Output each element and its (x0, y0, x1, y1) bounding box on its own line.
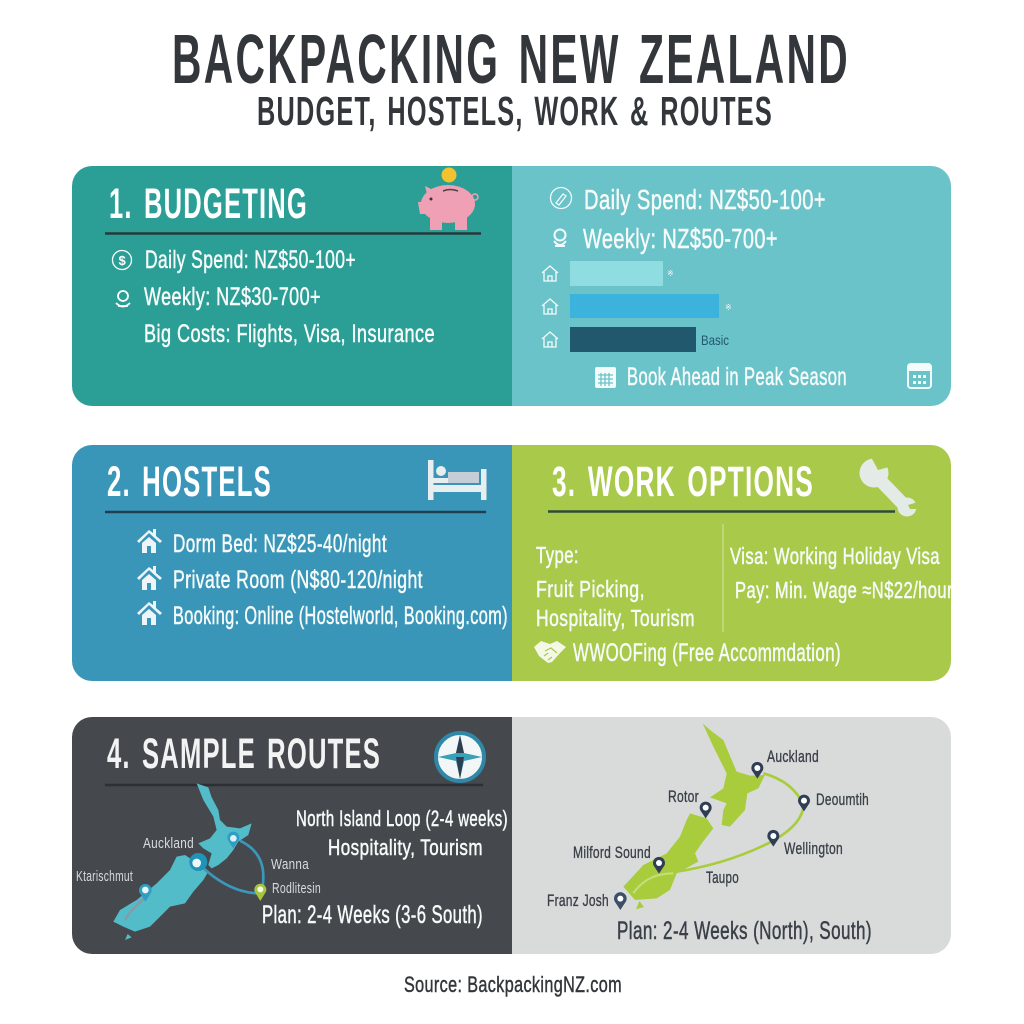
routes heading: 4. SAMPLE ROUTES (107, 730, 381, 778)
icon: house row 3 (542, 332, 558, 347)
work background (512, 445, 951, 681)
map label: routeburn: Rodlitesin (272, 880, 321, 897)
map: new zealand dark (113, 783, 266, 940)
hostels item: dorm bed: Dorm Bed: NZ$25-40/night (173, 530, 387, 558)
panel: route map (512, 717, 951, 954)
work item: visa: Visa: Working Holiday Visa (730, 543, 940, 569)
bar chart: accommodation tiers (542, 261, 732, 352)
route text: north island loop: North Island Loop (2-4 weeks) (296, 806, 508, 831)
icon: house (137, 601, 162, 625)
hostels item: private room: Private Room (N$80-120/night (173, 566, 423, 594)
hostels item: booking: Booking: Online (Hostelworld, Booking.com) (173, 602, 508, 630)
pin: green (254, 884, 266, 901)
icon: weekly pin (116, 291, 130, 306)
map label: rotor: Rotor (668, 787, 699, 806)
south island (113, 855, 208, 932)
panel: budgeting (72, 166, 512, 406)
south island (623, 813, 713, 900)
route map plan: Plan: 2-4 Weeks (North), South) (617, 917, 872, 945)
bar label: mid: ※ (725, 303, 732, 312)
bar: light (570, 261, 663, 286)
north island (197, 783, 252, 868)
work item: wwoofing: WWOOFing (Free Accommdation) (573, 639, 841, 667)
budgeting item: big costs: Big Costs: Flights, Visa, Insurance (144, 320, 435, 348)
map label: wellington: Wellington (784, 839, 843, 858)
map label: east: Deoumtih (816, 790, 869, 809)
map label: taupo: Taupo (706, 868, 739, 887)
pin: large (189, 853, 207, 871)
icon: calendar large (908, 364, 931, 388)
map: new zealand light (614, 723, 810, 910)
pin: rotor (700, 802, 712, 818)
map label: christchurch: Ktarischmut (76, 868, 133, 885)
budgeting item: daily spend: Daily Spend: NZ$50-100+ (145, 246, 356, 274)
detail: daily spend: Daily Spend: NZ$50-100+ (584, 184, 826, 215)
map label: milford sound: Milford Sound (573, 843, 651, 862)
route map background (512, 717, 951, 954)
hostels heading: 2. HOSTELS (107, 458, 272, 506)
icon: dollar coin: $ (118, 253, 126, 268)
hostels background (72, 445, 512, 681)
route text: plan: Plan: 2-4 Weeks (3-6 South) (262, 901, 483, 929)
icon: calendar small (595, 367, 616, 388)
route lines (198, 841, 263, 893)
pin: auckland (751, 762, 763, 779)
icon: bed (428, 460, 486, 500)
icon: tag circle (550, 188, 572, 208)
work heading: 3. WORK OPTIONS (552, 458, 814, 506)
details background (512, 166, 951, 406)
map label: wanna: Wanna (271, 856, 309, 873)
icon: piggy bank with coin (418, 168, 478, 230)
icon: house row 2 (542, 299, 558, 314)
bar label: light: ※ (667, 269, 674, 278)
bar: mid (570, 294, 719, 318)
routes background (72, 717, 512, 954)
panel: hostels (72, 445, 512, 681)
panel: budgeting details (512, 166, 951, 406)
icon: dollar coin (112, 250, 132, 270)
pin: upper (227, 832, 239, 848)
budgeting item: weekly: Weekly: NZ$30-700+ (144, 283, 321, 311)
map label: auckland: Auckland (143, 835, 194, 852)
panel: sample routes (72, 717, 512, 954)
pin: south (139, 884, 152, 902)
icon: weekly pin (554, 230, 566, 246)
source note: Source: BackpackingNZ.com (404, 972, 622, 997)
icon: compass (436, 733, 484, 781)
budgeting heading: 1. BUDGETING (109, 180, 308, 228)
icon: wrench (860, 455, 919, 516)
budgeting background (72, 166, 512, 406)
map label: auckland: Auckland (767, 747, 819, 766)
route text: hospitality: Hospitality, Tourism (328, 835, 483, 860)
work item: type: Type: (536, 542, 579, 568)
panel: work options (512, 445, 953, 681)
pin: east (798, 795, 810, 811)
callout: book ahead: Book Ahead in Peak Season (627, 363, 847, 391)
north island (703, 723, 765, 827)
detail: weekly: Weekly: NZ$50-700+ (583, 223, 778, 254)
icon: house (137, 566, 162, 590)
work item: fruit picking: Fruit Picking, (536, 576, 645, 602)
work item: hospitality: Hospitality, Tourism (536, 605, 695, 631)
map label: franz josef: Franz Josh (547, 891, 609, 910)
bar: basic (570, 327, 696, 352)
icon: house row 1 (542, 266, 558, 281)
icon: house (137, 529, 162, 553)
pin: wellington (767, 830, 779, 847)
route lines (677, 773, 803, 872)
pin: franz josef (614, 892, 627, 910)
title (172, 20, 850, 134)
icon: handshake (534, 641, 566, 663)
bar label: basic: Basic (701, 332, 729, 348)
pin: milford (653, 857, 665, 874)
